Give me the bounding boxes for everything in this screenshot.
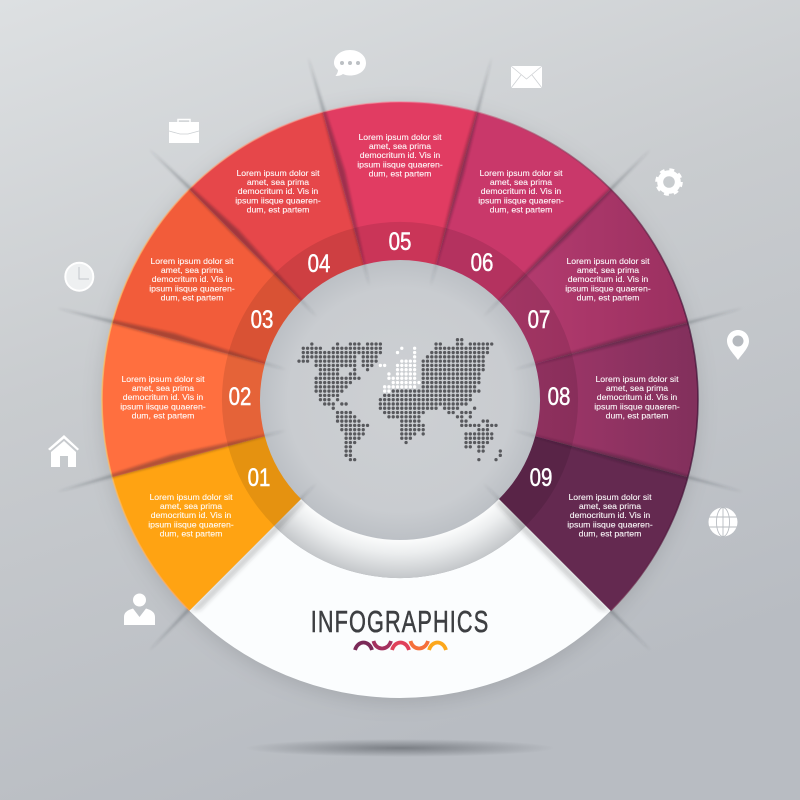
ring drop shadow <box>102 106 698 702</box>
text 01: dum, est partem <box>160 528 222 538</box>
panel: segment 04 <box>189 112 364 301</box>
number 07: 07 <box>528 305 550 333</box>
icon: envelope <box>511 66 542 88</box>
text 05: amet, sea prima <box>369 141 431 151</box>
text 09: dum, est partem <box>579 528 641 538</box>
text 07: dum, est partem <box>577 292 639 302</box>
text 09: amet, sea prima <box>579 501 641 511</box>
icon: house <box>48 435 79 467</box>
text 08: dum, est partem <box>606 410 668 420</box>
text 07: democritum id. Vis in <box>568 274 648 284</box>
number 08: 08 <box>548 382 570 410</box>
panel: segment 02 <box>102 323 265 477</box>
ring outer rim <box>102 102 698 611</box>
text 01: amet, sea prima <box>160 501 222 511</box>
text 04: amet, sea prima <box>247 177 309 187</box>
text 06: democritum id. Vis in <box>481 186 561 196</box>
text 02: ipsum iisque quaeren- <box>120 401 206 411</box>
text 04: democritum id. Vis in <box>238 186 318 196</box>
text 01: ipsum iisque quaeren- <box>148 519 234 529</box>
text 05: ipsum iisque quaeren- <box>357 159 443 169</box>
text 06: ipsum iisque quaeren- <box>478 195 564 205</box>
text 08: amet, sea prima <box>606 383 668 393</box>
text 06: Lorem ipsum dolor sit <box>479 168 563 178</box>
text 01: Lorem ipsum dolor sit <box>149 492 233 502</box>
divider spikes outside the ring <box>56 56 744 653</box>
number 09: 09 <box>530 463 552 491</box>
number 06: 06 <box>471 248 493 276</box>
panel: bottom white title sector <box>189 499 611 698</box>
text 02: dum, est partem <box>132 410 194 420</box>
text 03: democritum id. Vis in <box>152 274 232 284</box>
text 04: ipsum iisque quaeren- <box>235 195 321 205</box>
panel: segment 03 <box>112 189 301 364</box>
panel: segment 05 <box>323 102 477 265</box>
number 01: 01 <box>248 463 270 491</box>
text 03: ipsum iisque quaeren- <box>149 283 235 293</box>
text 09: Lorem ipsum dolor sit <box>568 492 652 502</box>
text 09: democritum id. Vis in <box>570 510 650 520</box>
panel: segment 06 <box>436 112 611 301</box>
icon: speech bubble <box>334 50 366 76</box>
divider shadows on the ring <box>111 111 688 479</box>
text 07: Lorem ipsum dolor sit <box>566 256 650 266</box>
text 02: amet, sea prima <box>132 383 194 393</box>
center circle <box>259 259 541 541</box>
text 03: amet, sea prima <box>161 265 223 275</box>
text 07: ipsum iisque quaeren- <box>565 283 651 293</box>
floor shadow <box>245 739 555 757</box>
number 03: 03 <box>251 305 273 333</box>
number 05: 05 <box>389 227 411 255</box>
text 01: democritum id. Vis in <box>151 510 231 520</box>
text 06: amet, sea prima <box>490 177 552 187</box>
icon: clock <box>65 263 93 291</box>
text 02: democritum id. Vis in <box>123 392 203 402</box>
icon: briefcase <box>169 120 199 143</box>
text 05: dum, est partem <box>369 168 431 178</box>
panel: segment 07 <box>499 189 688 364</box>
icon: gear <box>657 170 681 194</box>
text 02: Lorem ipsum dolor sit <box>121 374 205 384</box>
icon: globe <box>708 508 738 536</box>
text 03: Lorem ipsum dolor sit <box>150 256 234 266</box>
world map <box>299 340 500 460</box>
title wave ornament <box>355 641 446 650</box>
text 05: Lorem ipsum dolor sit <box>358 132 442 142</box>
number 02: 02 <box>229 382 251 410</box>
panel: segment 01 <box>112 436 301 611</box>
icon: location pin <box>727 330 749 360</box>
icon: person <box>124 594 155 625</box>
text 09: ipsum iisque quaeren- <box>567 519 653 529</box>
text 07: amet, sea prima <box>577 265 639 275</box>
text 06: dum, est partem <box>490 204 552 214</box>
soft shadows on white sector <box>190 499 610 611</box>
text 08: ipsum iisque quaeren- <box>594 401 680 411</box>
number 04: 04 <box>308 249 331 277</box>
text 05: democritum id. Vis in <box>360 150 440 160</box>
panel: segment 08 <box>535 323 698 477</box>
text 04: dum, est partem <box>247 204 309 214</box>
text 03: dum, est partem <box>161 292 223 302</box>
text 08: Lorem ipsum dolor sit <box>595 374 679 384</box>
title: INFOGRAPHICS <box>311 604 489 639</box>
panel: segment 09 <box>499 436 688 611</box>
text 04: Lorem ipsum dolor sit <box>236 168 320 178</box>
text 08: democritum id. Vis in <box>597 392 677 402</box>
